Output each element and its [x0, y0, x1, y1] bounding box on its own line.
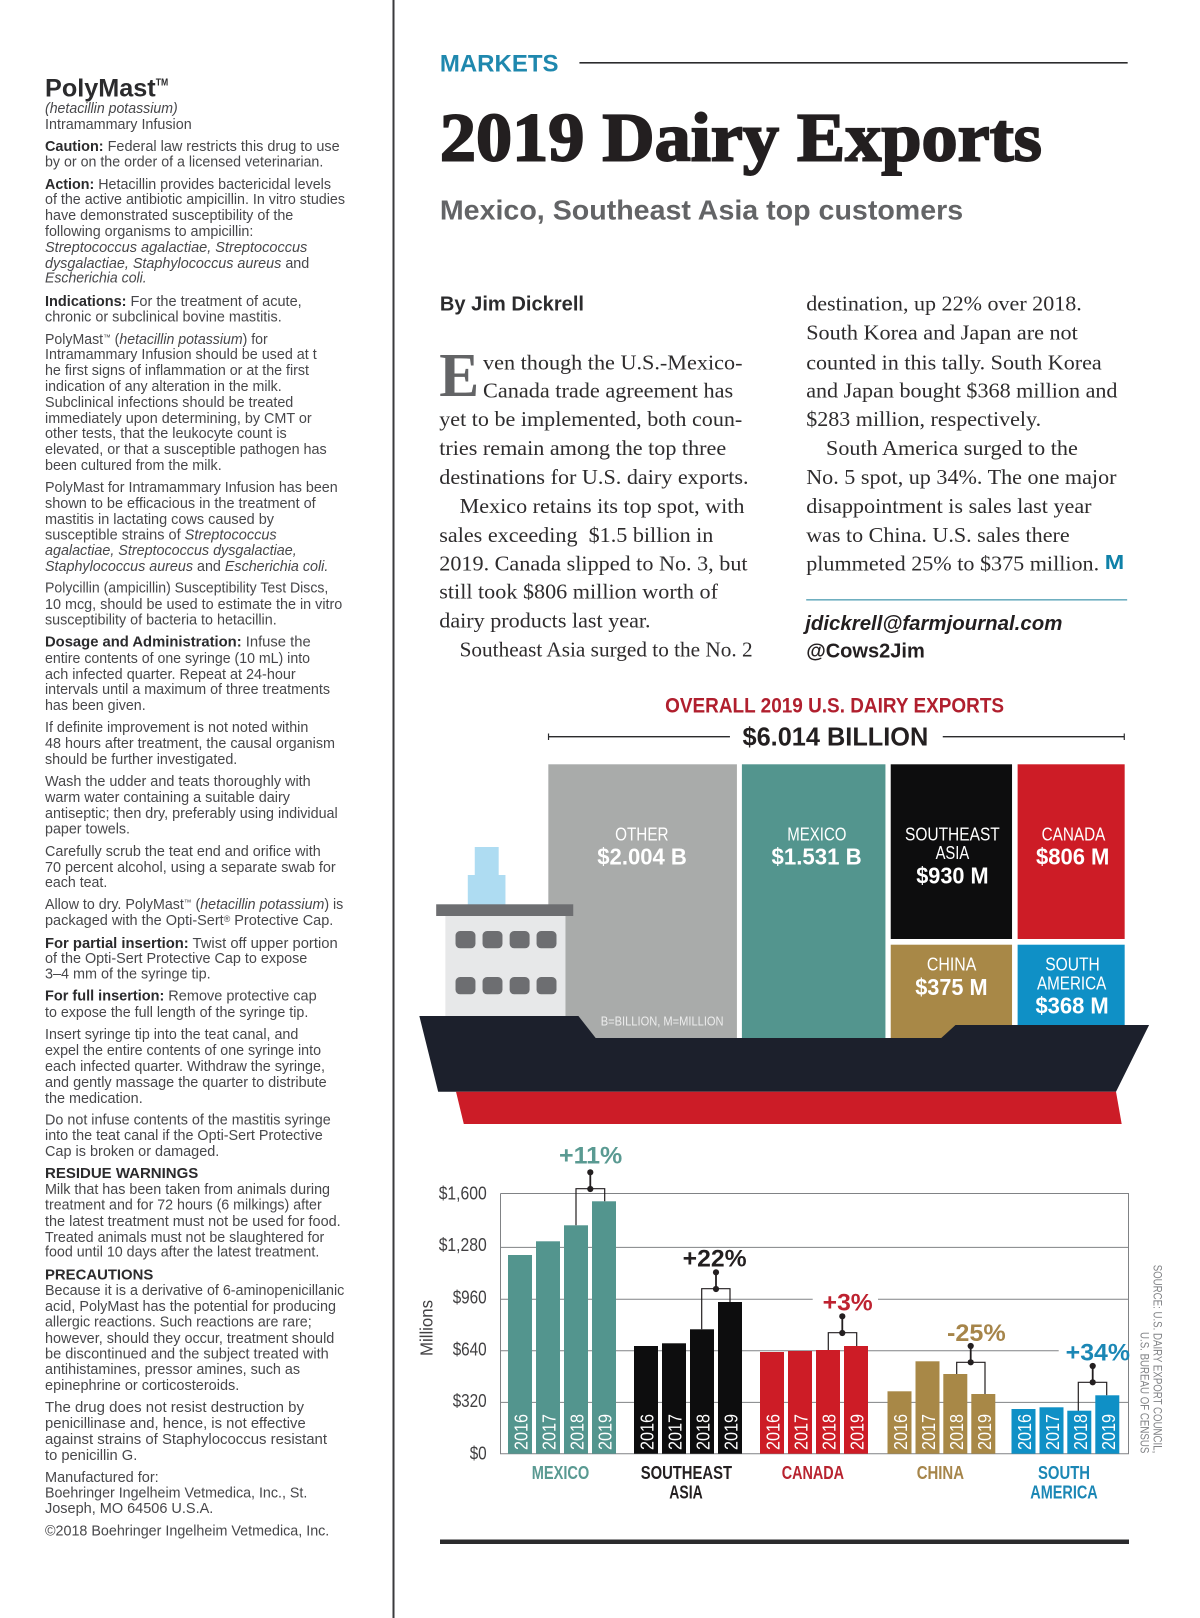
y axis labels: $320 — [453, 1390, 487, 1411]
text block: penicillinase: The drug does not resist destruction by — [45, 1400, 305, 1416]
text block: first signs: indication of any alteration in the milk. — [45, 379, 282, 395]
text block: penicillinase: against strains of Staphylococcus resistant — [45, 1432, 327, 1448]
title: 2019 Dairy Exports — [440, 100, 1042, 176]
cargo: mexico: $1.531 B — [772, 843, 862, 869]
article text: right column: South Korea and Japan are not — [806, 321, 1078, 345]
text block: allow to dry — [45, 897, 343, 929]
text block: precautions: however, should they occur, treatment should — [45, 1331, 334, 1347]
author contact: jdickrell@farmjournal.com — [802, 612, 1062, 635]
text block: efficacy: shown to be efficacious in the treatment of — [45, 496, 317, 512]
cargo: southeast asia: SOUTHEAST — [905, 823, 1000, 844]
bars: mexico: 2016 — [511, 1414, 532, 1450]
text block: first signs: immediately upon determining, by CMT or — [45, 411, 312, 427]
text block: indications: chronic or subclinical bovine mastitis. — [45, 309, 282, 325]
text block: first signs: ( — [111, 332, 119, 348]
text block: wash the udder: warm water containing a suitable dairy — [44, 790, 291, 806]
text block: scrub the teat: 70 percent alcohol, using a separate swab for — [45, 860, 336, 876]
bars: canada: 2018 — [819, 1414, 840, 1450]
text block: do not infuse: Do not infuse contents of the mastitis syringe — [45, 1113, 331, 1129]
change bracket: china — [957, 1343, 985, 1394]
text block: first signs: hetacillin potassium) for — [119, 332, 269, 348]
text block: first signs: been cultured from the milk. — [45, 458, 222, 474]
cargo: other — [548, 764, 737, 1044]
text block: allow to dry: ™ — [184, 898, 192, 907]
text block: allow to dry: Protective Cap. — [230, 913, 333, 929]
text block: do not infuse: into the teat canal if the Opti-Sert Protective — [45, 1128, 323, 1144]
bars: china: 2019 — [974, 1414, 995, 1450]
text block: efficacy: Staphylococcus aureus and Escherichia coli. — [45, 559, 328, 575]
text block: efficacy: mastitis in lactating cows caused by — [45, 512, 275, 528]
cargo: canada: $806 M — [1036, 843, 1109, 869]
y axis labels: $640 — [453, 1338, 487, 1359]
text block: residue warnings: food until 10 days after the latest treatment. — [45, 1245, 319, 1261]
cargo: southeast asia: $930 M — [916, 862, 989, 888]
text block: first signs: Intramammary Infusion should be used at t — [45, 347, 317, 363]
article text: right column: South America surged to the — [826, 436, 1078, 460]
change bracket: canada — [828, 1313, 857, 1350]
text block: residue warnings: Treated animals must not be slaughtered for — [45, 1230, 324, 1246]
bars: southeast asia: 2019 — [721, 1414, 742, 1450]
bars: southeast asia: SOUTHEAST — [641, 1462, 732, 1483]
cargo: canada — [1018, 764, 1125, 939]
article text: left column: dairy products last year. — [439, 609, 651, 633]
text block: manufacturer: Boehringer Ingelheim Vetmedica, Inc., St. — [45, 1486, 307, 1502]
sidebar heading: PolyMast: Intramammary Infusion — [45, 117, 192, 133]
article text: left column — [439, 342, 753, 662]
end mark M: M — [1105, 551, 1124, 574]
section header: markets: MARKETS — [440, 51, 558, 78]
text block: efficacy: susceptible strains of Streptococcus — [45, 527, 277, 543]
cargo: southeast asia — [891, 764, 1012, 939]
text block: no improvement: If definite improvement is not noted within — [45, 720, 308, 736]
text block: efficacy: PolyMast for Intramammary Infusion has been — [45, 480, 338, 496]
text block: dosage and administration: ach infected quarter. Repeat at 24-hour — [45, 667, 296, 683]
text block: precautions: Because it is a derivative of 6-aminopenicillanic — [45, 1283, 344, 1299]
bottom rule — [440, 1540, 1129, 1544]
bars: canada: +3% — [823, 1290, 873, 1317]
total value: $6.014 BILLION — [743, 724, 928, 752]
text block: caution: by or on the order of a licensed veterinarian. — [45, 154, 323, 170]
bars: china: CHINA — [917, 1462, 964, 1483]
text block: partial insertion — [45, 936, 338, 983]
cargo: other: OTHER — [615, 823, 669, 844]
text block: partial insertion: For partial insertion: Twist off upper portion — [45, 936, 338, 952]
bars: south america: 2016 — [1014, 1414, 1035, 1450]
ship and cargo treemap — [419, 764, 1149, 1124]
text block: wash the udder — [44, 774, 338, 838]
change bracket: south america — [1078, 1363, 1107, 1411]
bars: mexico — [508, 1142, 623, 1483]
text block: penicillinase: penicillinase and, hence, is not effective — [45, 1416, 306, 1432]
bars: south america: 2019 — [1098, 1414, 1119, 1450]
text block: first signs: ™ — [103, 333, 111, 342]
bars: canada: 2019 — [847, 1414, 868, 1450]
article text: right column: and Japan bought $368 million and — [806, 378, 1118, 402]
bars: south america: +34% — [1066, 1340, 1130, 1367]
bars: southeast asia — [634, 1246, 747, 1503]
text block: manufacturer: Manufactured for: — [45, 1470, 159, 1486]
text block: residue warnings: the latest treatment must not be used for food. — [45, 1214, 341, 1230]
text block: dosage and administration: has been given. — [45, 698, 146, 714]
text block: dosage and administration: Dosage and Administration: Infuse the — [45, 635, 311, 651]
text block: precautions: acid, PolyMast has the potential for producing — [45, 1299, 336, 1315]
text block: action — [45, 177, 345, 287]
bars: mexico: +11% — [559, 1142, 623, 1169]
bars: canada — [760, 1290, 873, 1483]
text block: first signs: Subclinical infections should be treated — [45, 395, 293, 411]
bars: canada: CANADA — [782, 1462, 844, 1483]
cargo: southeast asia: ASIA — [936, 842, 970, 863]
total span bracket — [548, 734, 1125, 740]
text block: first signs: other tests, that the leukocyte count is — [45, 426, 287, 442]
author contact — [802, 612, 1062, 662]
text block: allow to dry: ® — [224, 914, 231, 924]
ship hull — [419, 1016, 1149, 1092]
text block: dosage and administration: entire contents of one syringe (10 mL) into — [45, 651, 310, 667]
cargo: canada: CANADA — [1042, 823, 1106, 844]
text block: caution — [45, 139, 340, 170]
text block: allow to dry: hetacillin potassium) is — [200, 897, 344, 913]
article text: right column: plummeted 25% to $375 million. — [806, 552, 1099, 576]
bars: mexico: 2017 — [539, 1414, 560, 1450]
y axis labels: $1,280 — [439, 1234, 487, 1255]
text block: do not infuse: Cap is broken or damaged. — [45, 1144, 219, 1160]
article text: left column: yet to be implemented, both coun- — [439, 407, 742, 431]
text block: do not infuse — [45, 1113, 331, 1160]
source note: SOURCE: U.S. DAIRY EXPORT COUNCIL, — [1150, 1265, 1164, 1453]
text block: precautions: antihistamines, pressor amines, such as — [45, 1362, 300, 1378]
text block: penicillinase: to penicillin G. — [45, 1448, 137, 1464]
article text: left column: sales exceeding $1.5 billion in — [439, 523, 714, 547]
cargo: south america: AMERICA — [1037, 972, 1107, 993]
text block: precautions: epinephrine or corticosteroids. — [45, 1378, 239, 1394]
text block: residue warnings: RESIDUE WARNINGS — [45, 1166, 199, 1182]
ship funnel — [468, 847, 505, 905]
article text: right column: No. 5 spot, up 34%. The one major — [806, 465, 1116, 489]
text block: insert syringe: Insert syringe tip into the teat canal, and — [45, 1027, 298, 1043]
bars: mexico: 2019 — [595, 1414, 616, 1450]
cargo: south america: $368 M — [1035, 992, 1109, 1018]
sidebar heading: PolyMast: (hetacillin potassium) — [45, 101, 178, 117]
text block: insert syringe: expel the entire contents of one syringe into — [45, 1043, 321, 1059]
article text: left column: destinations for U.S. dairy exports. — [439, 465, 749, 489]
y axis labels: $960 — [453, 1286, 487, 1307]
change bracket: southeast asia — [702, 1269, 730, 1329]
article text: right column: $283 million, respectively. — [806, 407, 1041, 431]
ship cabin — [436, 904, 573, 1018]
cargo: other: $2.004 B — [597, 843, 687, 869]
text block: precautions: be discontinued and the subject treated with — [45, 1347, 329, 1363]
text block: first signs — [45, 332, 327, 474]
bars: china: -25% — [947, 1320, 1006, 1347]
text block: no improvement: should be further investigated. — [45, 752, 237, 768]
article text: right column: was to China. U.S. sales there — [806, 523, 1070, 547]
text block: manufacturer: Joseph, MO 64506 U.S.A. — [45, 1501, 213, 1517]
bars: south america: 2018 — [1070, 1414, 1091, 1450]
text block: insert syringe: and gently massage the quarter to distribute — [45, 1075, 327, 1091]
cargo: china: $375 M — [915, 974, 988, 1000]
text block: full insertion — [45, 989, 317, 1021]
cargo: mexico: MEXICO — [787, 823, 846, 844]
text block: test discs: 10 mcg, should be used to estimate the in vitro — [45, 597, 342, 613]
bars: mexico: 2018 — [567, 1414, 588, 1450]
author contact: @Cows2Jim — [806, 639, 925, 662]
text block: wash the udder: paper towels. — [45, 822, 130, 838]
cargo: south america — [1018, 945, 1125, 1030]
cargo: china: CHINA — [927, 953, 977, 974]
bars: south america — [1012, 1340, 1130, 1503]
bar chart: exports by destination 2016-2019 — [417, 1142, 1130, 1503]
text block: dosage and administration: intervals until a maximum of three treatments — [45, 682, 330, 698]
text block: scrub the teat: each teat. — [45, 875, 107, 891]
text block: precautions — [45, 1267, 344, 1394]
cargo: other: B=BILLION, M=MILLION — [601, 1014, 724, 1028]
text block: action: have demonstrated susceptibility of the — [45, 208, 293, 224]
article text: left column: Mexico retains its top spot, with — [460, 494, 745, 518]
text block: first signs: elevated, or that a susceptible pathogen has — [45, 442, 327, 458]
text block: efficacy — [45, 480, 338, 575]
text block: precautions: PRECAUTIONS — [45, 1267, 154, 1283]
text block: manufacturer — [45, 1470, 307, 1517]
text block: action: Escherichia coli. — [45, 271, 147, 287]
text block: full insertion: to expose the full length of the syringe tip. — [45, 1005, 308, 1021]
sidebar heading: PolyMast — [45, 74, 192, 133]
text block: precautions: allergic reactions. Such reactions are rare; — [45, 1315, 312, 1331]
text block: action: dysgalactiae, Staphylococcus aureus and — [45, 256, 309, 272]
text block: scrub the teat — [45, 844, 336, 891]
infographic heading: OVERALL 2019 U.S. DAIRY EXPORTS — [665, 694, 1004, 717]
text block: insert syringe — [45, 1027, 327, 1107]
text block: allow to dry: Allow to dry. PolyMast — [45, 897, 188, 913]
subtitle: Mexico, Southeast Asia top customers — [440, 194, 963, 225]
article text: right column: disappointment is sales last year — [806, 494, 1092, 518]
panel: PolyMast drug information sidebar — [44, 74, 345, 1540]
bars: china: 2017 — [918, 1414, 939, 1450]
article text: right column: counted in this tally. South Korea — [806, 350, 1102, 374]
article text: right column — [806, 292, 1118, 576]
text block: indications: Indications: For the treatment of acute, — [45, 294, 302, 310]
chart grid — [500, 1194, 1128, 1454]
bars: china: 2018 — [946, 1414, 967, 1450]
bars: southeast asia: 2018 — [693, 1414, 714, 1450]
text block: action: following organisms to ampicillin: — [45, 224, 253, 240]
ship waterline — [456, 1092, 1122, 1124]
text block: insert syringe: the medication. — [45, 1091, 143, 1107]
text block: wash the udder: antiseptic; then dry, preferably using individual — [45, 806, 338, 822]
text block: residue warnings: Milk that has been taken from animals during — [45, 1182, 330, 1198]
article text: left column: ven though the U.S.-Mexico- — [483, 350, 743, 374]
sidebar heading: PolyMast: TM — [156, 78, 168, 88]
text block: no improvement: 48 hours after treatment, the causal organism — [45, 736, 335, 752]
text block: wash the udder: Wash the udder and teats thoroughly with — [45, 774, 311, 790]
y axis labels — [439, 1182, 487, 1463]
bars: southeast asia: ASIA — [669, 1482, 703, 1503]
cargo: china — [891, 945, 1012, 1045]
infographic heading — [548, 694, 1125, 752]
cargo: mexico — [742, 764, 885, 1044]
bars: southeast asia: +22% — [683, 1246, 747, 1273]
text block: residue warnings: treatment and for 72 hours (6 milkings) after — [45, 1198, 322, 1214]
text block: no improvement — [45, 720, 335, 768]
text block: partial insertion: of the Opti-Sert Protective Cap to expose — [45, 951, 307, 967]
text block: test discs — [45, 581, 342, 629]
text block: action: Streptococcus agalactiae, Streptococcus — [45, 240, 308, 256]
y axis title: Millions — [417, 1300, 437, 1356]
bars: mexico: MEXICO — [532, 1462, 589, 1483]
bars: south america: AMERICA — [1030, 1482, 1098, 1503]
article text: left column: Canada trade agreement has — [483, 378, 733, 402]
article text: right column: destination, up 22% over 2018. — [806, 292, 1082, 316]
text block: efficacy: agalactiae, Streptococcus dysgalactiae, — [45, 543, 297, 559]
text block: residue warnings — [45, 1166, 341, 1261]
source note — [1138, 1265, 1164, 1453]
bars: southeast asia: 2017 — [665, 1414, 686, 1450]
text block: scrub the teat: Carefully scrub the teat end and orifice with — [45, 844, 321, 860]
column divider — [392, 0, 394, 1618]
author rule — [806, 599, 1127, 601]
text block: test discs: Polycillin (ampicillin) Susceptibility Test Discs, — [45, 581, 328, 597]
text block: indications — [45, 294, 302, 325]
article text: left column: 2019. Canada slipped to No. 3, but — [439, 552, 748, 576]
article text: left column: Southeast Asia surged to the No. 2 — [460, 638, 753, 662]
bars: south america: 2017 — [1042, 1414, 1063, 1450]
change bracket: mexico — [576, 1169, 605, 1225]
bars: canada: 2017 — [791, 1414, 812, 1450]
text block: insert syringe: each infected quarter. Withdraw the syringe, — [45, 1059, 325, 1075]
text block: partial insertion: 3–4 mm of the syringe tip. — [45, 967, 211, 983]
bars: canada: 2016 — [763, 1414, 784, 1450]
text block: allow to dry: ( — [192, 897, 200, 913]
byline: By Jim Dickrell — [440, 294, 584, 316]
drop cap: E — [439, 342, 479, 410]
y axis labels: $0 — [470, 1442, 487, 1463]
y axis labels: $1,600 — [439, 1182, 487, 1203]
text block: allow to dry: packaged with the Opti-Sert — [45, 913, 226, 929]
bars: china — [888, 1320, 1006, 1483]
text block: copyright: ©2018 Boehringer Ingelheim Vetmedica, Inc. — [45, 1524, 329, 1540]
bars: southeast asia: 2016 — [637, 1414, 658, 1450]
bars: china: 2016 — [890, 1414, 911, 1450]
text block: action: Action: Hetacillin provides bactericidal levels — [45, 177, 331, 193]
text block: first signs: PolyMast — [45, 332, 105, 348]
text block: penicillinase — [45, 1400, 327, 1464]
article text: left column: still took $806 million worth of — [439, 580, 719, 604]
text block: full insertion: For full insertion: Remove protective cap — [45, 989, 317, 1005]
text block: action: of the active antibiotic ampicillin. In vitro studies — [45, 192, 345, 208]
text block: caution: Caution: Federal law restricts this drug to use — [45, 139, 340, 155]
text block: first signs: he first signs of inflammation or at the first — [45, 363, 309, 379]
cabin windows — [456, 931, 556, 994]
bars: south america: SOUTH — [1038, 1462, 1090, 1483]
cargo: south america: SOUTH — [1045, 953, 1100, 974]
article text: left column: tries remain among the top three — [439, 436, 726, 460]
source note: U.S. BUREAU OF CENSUS — [1138, 1332, 1152, 1453]
text block: dosage and administration — [45, 635, 330, 714]
text block: test discs: susceptibility of bacteria to hetacillin. — [45, 613, 277, 629]
sidebar heading: PolyMast: PolyMast — [45, 74, 156, 102]
